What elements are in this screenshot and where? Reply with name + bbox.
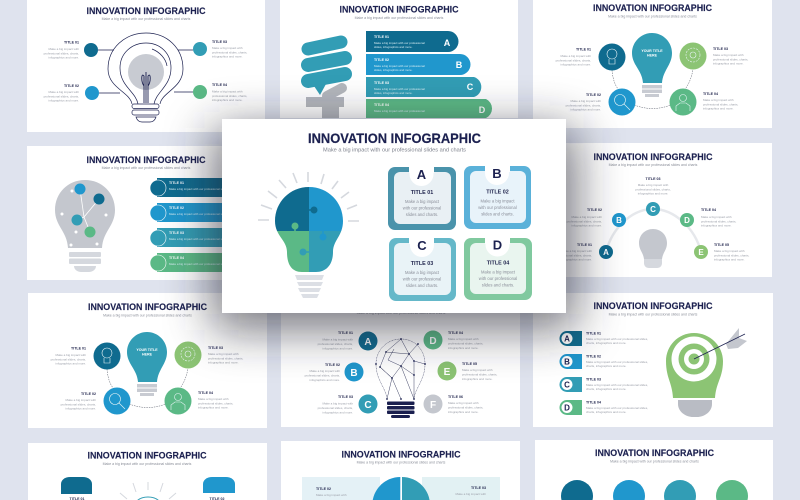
light boxes bbox=[302, 477, 500, 500]
slide subtitle: Make a big impact with our professional slides and charts bbox=[102, 17, 191, 21]
bar C bbox=[366, 77, 481, 97]
list A to D: Make a big impact with our professional slides, bbox=[586, 337, 648, 341]
icon: central bulb: YOUR TITLE bbox=[641, 49, 663, 53]
icon: central bulb: HERE bbox=[647, 54, 658, 58]
labels: TITLE 02 bbox=[586, 93, 601, 97]
labels: professional slides, charts, bbox=[305, 374, 340, 378]
labels: Make a big impact with bbox=[212, 90, 243, 94]
icon: puzzle light bulb bbox=[258, 172, 359, 298]
slide subtitle: Make a big impact with our professional slides and charts bbox=[103, 314, 192, 318]
card C: Make a big impact bbox=[405, 270, 440, 275]
labels: Make a big impact with bbox=[198, 397, 229, 401]
labels: professional slides, charts, bbox=[212, 94, 248, 98]
panel: central bulb with four circles, lower left bbox=[28, 293, 267, 428]
labels: TITLE 02 bbox=[587, 208, 602, 212]
labels: infographics and more. bbox=[448, 346, 479, 350]
icon: central bulb bbox=[127, 332, 167, 396]
labels: infographics and more. bbox=[571, 224, 602, 228]
list A to D: Make a big impact with our professional slides, bbox=[586, 406, 648, 410]
bar A: TITLE 01 bbox=[374, 35, 389, 39]
list A to D: TITLE 01 bbox=[586, 332, 601, 336]
banner list: TITLE 01 bbox=[169, 181, 184, 185]
labels: infographics and more. bbox=[322, 410, 353, 414]
labels: infographics and more. bbox=[714, 258, 745, 262]
bar A: A bbox=[444, 38, 451, 48]
rays and arc bbox=[120, 482, 176, 500]
card B: B bbox=[492, 166, 502, 181]
slide title: INNOVATION INFOGRAPHIC bbox=[88, 302, 207, 313]
bar B: Make a big impact with our professional bbox=[374, 64, 425, 68]
labels: Make a big impact with bbox=[713, 53, 744, 57]
list A to D: B bbox=[564, 358, 570, 366]
main subtitle: Make a big impact with our professional slides and charts bbox=[323, 148, 466, 154]
labels: TITLE 02 bbox=[81, 392, 96, 396]
labels: infographics and more. bbox=[703, 107, 734, 111]
card B: slides and charts. bbox=[481, 212, 514, 216]
four icon circles bbox=[561, 480, 748, 500]
letter circles: B bbox=[350, 368, 358, 379]
labels: infographics and more. bbox=[212, 55, 243, 59]
labels: professional slides, charts, bbox=[567, 219, 602, 223]
labels: TITLE 04 bbox=[198, 391, 213, 395]
slide title: INNOVATION INFOGRAPHIC bbox=[88, 450, 207, 462]
list A to D: charts, infographics and more. bbox=[586, 387, 627, 391]
labels: professional slides, charts, bbox=[713, 57, 749, 61]
letter circles: A bbox=[364, 337, 372, 348]
four circles bbox=[94, 342, 202, 414]
labels: TITLE 04 bbox=[212, 83, 227, 87]
list A to D: TITLE 04 bbox=[586, 400, 601, 404]
labels: TITLE 01 bbox=[577, 243, 592, 247]
slide subtitle: Make a big impact with our professional slides and charts bbox=[355, 16, 444, 20]
card C: TITLE 03 bbox=[411, 261, 433, 267]
labels: infographics and more. bbox=[462, 377, 493, 381]
card B: TITLE 02 bbox=[486, 190, 509, 196]
labels: professional slides, charts, bbox=[448, 406, 484, 410]
arc with letter nodes: B bbox=[616, 216, 622, 225]
labels: professional slides, charts, bbox=[318, 406, 353, 410]
connectors and nodes bbox=[84, 42, 207, 100]
slide title: INNOVATION INFOGRAPHIC bbox=[595, 448, 714, 459]
labels: Make a big impact with bbox=[560, 54, 591, 58]
labels: Make a big impact with bbox=[448, 401, 479, 405]
card B: Make a big impact bbox=[481, 198, 515, 204]
icon: lattice bulb bbox=[375, 338, 426, 418]
labels: TITLE 01 bbox=[71, 346, 86, 350]
card C bbox=[389, 233, 456, 301]
bar C: Make a big impact with our professional bbox=[374, 87, 425, 91]
slide title: INNOVATION INFOGRAPHIC bbox=[593, 3, 712, 14]
panel: target bulb slide bbox=[533, 293, 773, 427]
bar B: slides, infographics and more. bbox=[374, 68, 413, 72]
labels: TITLE 02 bbox=[325, 363, 340, 367]
labels: Make a big impact with bbox=[638, 183, 669, 187]
labels: Make a big impact with bbox=[48, 90, 79, 94]
card D: slides and charts. bbox=[482, 282, 514, 288]
arc with letter nodes: D bbox=[684, 216, 690, 225]
labels: infographics and more. bbox=[560, 63, 591, 67]
dashed connectors bbox=[612, 68, 693, 108]
labels: professional slides, charts, bbox=[701, 219, 737, 223]
labels: professional slides, charts, bbox=[557, 253, 592, 257]
labels: professional slides, charts, bbox=[448, 342, 484, 346]
bar D: D bbox=[479, 105, 486, 115]
card D: Make a big impact bbox=[481, 270, 516, 274]
labels: infographics and more. bbox=[55, 362, 86, 366]
list A to D bbox=[560, 331, 648, 415]
segmented circle bbox=[372, 477, 430, 500]
slide subtitle: Make a big impact with our professional slides and charts bbox=[610, 460, 699, 464]
dashed connectors bbox=[107, 367, 188, 408]
arc with letter nodes: A bbox=[603, 248, 609, 257]
letter circles: C bbox=[364, 400, 372, 411]
labels: infographics and more. bbox=[713, 62, 744, 66]
card B bbox=[464, 161, 531, 229]
slide title: INNOVATION INFOGRAPHIC bbox=[594, 152, 713, 163]
icon: central bulb bbox=[632, 33, 672, 97]
bar C: C bbox=[467, 82, 474, 92]
labels: Make a big impact with bbox=[65, 398, 96, 402]
labels: TITLE 03 bbox=[212, 40, 227, 44]
labels bbox=[305, 331, 498, 414]
labels bbox=[51, 346, 244, 411]
labels: TITLE 06 bbox=[448, 395, 463, 399]
panel: main slide bbox=[222, 119, 566, 313]
panel: bottom left slide bbox=[28, 443, 267, 500]
panel: bottom middle slide bbox=[281, 441, 520, 500]
labels: TITLE 03 bbox=[208, 346, 223, 350]
labels: infographics and more. bbox=[198, 406, 229, 410]
labels: TITLE 05 bbox=[462, 362, 477, 366]
bar C: TITLE 03 bbox=[374, 81, 389, 85]
list A to D: TITLE 03 bbox=[586, 378, 601, 382]
card C: C bbox=[417, 238, 427, 253]
icon: gray bulb bbox=[639, 229, 667, 268]
list A to D: A bbox=[564, 334, 570, 344]
panel: outline bulb slide bbox=[27, 0, 265, 132]
labels: infographics and more. bbox=[638, 192, 668, 196]
labels: TITLE 03 bbox=[338, 395, 353, 399]
arc with letter nodes: E bbox=[698, 248, 704, 257]
labels: Make a big impact with bbox=[55, 353, 86, 357]
labels: Make a big impact with bbox=[212, 46, 243, 50]
labels: TITLE 03 bbox=[646, 177, 660, 181]
labels: Make a big impact with bbox=[448, 337, 479, 341]
bar C: slides, infographics and more. bbox=[374, 91, 413, 95]
card A: A bbox=[417, 167, 427, 182]
list A to D: D bbox=[564, 404, 570, 412]
slide subtitle: Make a big impact with our professional slides and charts bbox=[102, 166, 191, 170]
slide title: INNOVATION INFOGRAPHIC bbox=[342, 450, 461, 460]
labels: professional slides, charts, bbox=[566, 103, 601, 107]
slide subtitle: Make a big impact with our professional slides and charts bbox=[357, 311, 446, 315]
panel: arc timeline slide bbox=[533, 143, 772, 277]
slide subtitle: Make a big impact with our professional slides and charts bbox=[608, 14, 697, 18]
bar D bbox=[366, 99, 492, 118]
light boxes: TITLE 02 bbox=[316, 487, 331, 491]
labels: infographics and more. bbox=[309, 378, 340, 382]
labels: TITLE 03 bbox=[713, 47, 728, 51]
card D: TITLE 04 bbox=[487, 260, 509, 266]
labels: infographics and more. bbox=[448, 410, 479, 414]
labels: infographics and more. bbox=[322, 346, 353, 350]
labels: professional slides, charts, bbox=[208, 356, 244, 360]
banner list: TITLE 03 bbox=[169, 231, 184, 235]
bar D: Make a big impact with our professional bbox=[374, 109, 425, 113]
letter circles: E bbox=[444, 367, 451, 378]
labels: Make a big impact with bbox=[322, 338, 353, 342]
labels: Make a big impact with bbox=[462, 368, 493, 372]
labels bbox=[44, 40, 248, 103]
icon: target bulb bbox=[666, 328, 747, 417]
slide subtitle: Make a big impact with our professional slides and charts bbox=[609, 312, 698, 316]
labels: TITLE 01 bbox=[576, 48, 591, 52]
card A bbox=[388, 162, 456, 230]
icon: spiral bulb bbox=[306, 42, 345, 118]
banner list: TITLE 04 bbox=[169, 256, 184, 260]
letter circles: F bbox=[430, 400, 436, 411]
panel: spiral bulb slide bbox=[280, 0, 518, 118]
bar A bbox=[366, 31, 458, 52]
four circles bbox=[598, 42, 706, 116]
labels: infographics and more. bbox=[48, 99, 79, 103]
labels: professional slides, charts, bbox=[212, 50, 248, 54]
card A: Make a big impact bbox=[405, 199, 440, 204]
letter circles bbox=[344, 330, 456, 414]
card D: D bbox=[493, 238, 502, 252]
labels: TITLE 04 bbox=[701, 208, 716, 212]
labels bbox=[557, 177, 750, 262]
labels: Make a big impact with bbox=[48, 47, 79, 51]
labels: Make a big impact with bbox=[309, 369, 340, 373]
labels: professional slides, charts, bbox=[714, 253, 750, 257]
labels: Make a big impact with bbox=[703, 98, 734, 102]
labels: infographics and more. bbox=[701, 224, 732, 228]
icon tabs bbox=[61, 477, 235, 500]
card A: slides and charts. bbox=[406, 212, 438, 217]
bulb base bbox=[295, 275, 324, 298]
icon: central bulb: YOUR TITLE bbox=[136, 348, 158, 352]
list A to D: charts, infographics and more. bbox=[586, 364, 627, 368]
rays bbox=[258, 172, 359, 221]
arc with letter nodes bbox=[599, 202, 708, 259]
letter circles: D bbox=[429, 336, 437, 347]
banner list: TITLE 02 bbox=[169, 206, 184, 210]
labels: professional slides, charts, bbox=[318, 342, 353, 346]
list A to D: Make a big impact with our professional slides, bbox=[586, 360, 648, 364]
bar A: Make a big impact with our professional bbox=[374, 41, 425, 45]
labels: professional slides, charts, bbox=[462, 372, 498, 376]
icon: gray network bulb bbox=[55, 180, 115, 272]
card D: with our professional bbox=[479, 276, 517, 281]
bar B: B bbox=[456, 60, 463, 70]
icon: outline light bulb bbox=[108, 33, 183, 122]
slide subtitle: Make a big impact with our professional slides and charts bbox=[103, 462, 192, 466]
labels: TITLE 05 bbox=[714, 243, 729, 247]
banner list: Make a big impact with our professional slides bbox=[169, 262, 229, 266]
icon: central bulb: HERE bbox=[142, 352, 153, 356]
labels: Make a big impact with bbox=[714, 249, 745, 253]
labels: infographics and more. bbox=[208, 361, 239, 365]
labels: infographics and more. bbox=[48, 56, 79, 60]
panel: lattice bulb slide bbox=[281, 293, 520, 427]
labels: professional slides, charts, bbox=[44, 94, 79, 98]
labels: infographics and more. bbox=[570, 108, 601, 112]
arc with letter nodes: C bbox=[650, 205, 656, 214]
labels: TITLE 04 bbox=[703, 92, 718, 96]
banner list: Make a big impact with our professional slides bbox=[169, 187, 229, 191]
labels: Make a big impact with bbox=[322, 402, 353, 406]
list A to D: C bbox=[564, 380, 570, 390]
labels: TITLE 01 bbox=[64, 40, 79, 44]
labels: professional slides, charts, bbox=[703, 102, 739, 106]
panel: network bulb slide bbox=[27, 146, 267, 280]
labels: infographics and more. bbox=[212, 98, 243, 102]
labels: professional slides, charts, bbox=[44, 51, 79, 55]
banner list bbox=[150, 178, 267, 272]
labels: infographics and more. bbox=[561, 258, 592, 262]
labels bbox=[556, 47, 749, 112]
panel: central bulb with four circles, top right bbox=[533, 0, 772, 128]
bar B: TITLE 02 bbox=[374, 58, 389, 62]
labels: Make a big impact with bbox=[701, 215, 732, 219]
labels: Make a big impact with bbox=[561, 249, 592, 253]
labels: professional slides, charts, bbox=[61, 402, 96, 406]
slide title: INNOVATION INFOGRAPHIC bbox=[86, 155, 206, 166]
labels: infographics and more. bbox=[65, 407, 96, 411]
slide title: INNOVATION INFOGRAPHIC bbox=[594, 301, 713, 312]
panel: bottom right slide bbox=[535, 440, 773, 500]
list A to D: Make a big impact with our professional slides, bbox=[586, 383, 648, 387]
labels: TITLE 01 bbox=[338, 331, 353, 335]
slide subtitle: Make a big impact with our professional slides and charts bbox=[357, 460, 446, 464]
light boxes: Make a big impact with bbox=[455, 492, 486, 496]
bar A: slides, infographics and more. bbox=[374, 45, 413, 49]
labels: professional slides, charts, bbox=[51, 357, 86, 361]
slide title: INNOVATION INFOGRAPHIC bbox=[86, 6, 206, 17]
card D bbox=[464, 232, 532, 300]
puzzle pieces bbox=[275, 187, 343, 272]
main title: INNOVATION INFOGRAPHIC bbox=[308, 131, 481, 146]
slide title: INNOVATION INFOGRAPHIC bbox=[340, 4, 459, 16]
labels: Make a big impact with bbox=[208, 352, 239, 356]
labels: Make a big impact with bbox=[570, 99, 601, 103]
labels: professional slides, charts, bbox=[556, 58, 591, 62]
list A to D: charts, infographics and more. bbox=[586, 410, 627, 414]
banner list: Make a big impact with our professional slides bbox=[169, 237, 229, 241]
labels: TITLE 02 bbox=[64, 84, 79, 88]
list A to D: TITLE 02 bbox=[586, 354, 601, 358]
card C: with our professional bbox=[403, 276, 441, 282]
bar D: TITLE 04 bbox=[374, 103, 389, 107]
card C: slides and charts. bbox=[406, 283, 438, 288]
labels: Make a big impact with bbox=[571, 215, 602, 219]
shadow of main slide bbox=[212, 128, 576, 330]
banner list: Make a big impact with our professional slides bbox=[169, 212, 229, 216]
puzzle knobs bbox=[292, 206, 326, 256]
labels: professional slides, charts, bbox=[198, 401, 234, 405]
card A: TITLE 01 bbox=[411, 190, 433, 196]
light boxes: Make a big impact with bbox=[316, 493, 347, 497]
slide subtitle: Make a big impact with our professional slides and charts bbox=[609, 163, 698, 167]
card A: with our professional bbox=[403, 206, 441, 210]
list A to D: charts, infographics and more. bbox=[586, 341, 627, 345]
labels: professional slides, charts, bbox=[635, 187, 671, 191]
card B: with our professional bbox=[478, 205, 517, 210]
bar B bbox=[366, 54, 470, 75]
light boxes: TITLE 03 bbox=[471, 486, 486, 490]
labels: TITLE 04 bbox=[448, 331, 463, 335]
